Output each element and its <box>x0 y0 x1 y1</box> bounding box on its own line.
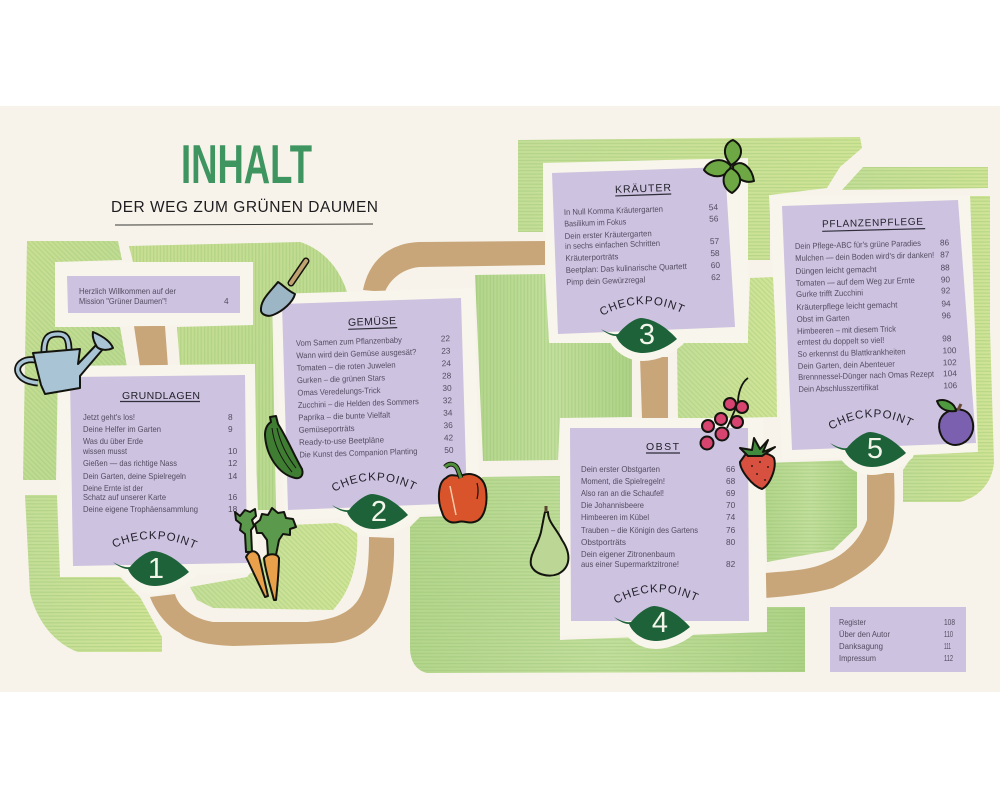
entries: Pflanzenpflege: Dein Abschlusszertifikat <box>798 382 879 394</box>
entries: Gemüse: Tomaten – die roten Juwelen <box>297 360 396 373</box>
panel: Kräuter <box>552 168 735 353</box>
checkpoint 2 leaf <box>332 494 408 529</box>
panel: Gemüse <box>282 298 466 529</box>
entries: Gemüse: 30 <box>442 383 452 393</box>
entries: Gemüse: Gurken – die grünen Stars <box>297 372 385 385</box>
icon: zucchini <box>265 416 303 478</box>
entries: Kräuter: 62 <box>711 272 721 282</box>
entries: Kräuter: 57 <box>710 236 720 246</box>
entries: Grundlagen: 18 <box>228 504 238 514</box>
garden fields <box>23 137 994 673</box>
entries: Kräuter: Dein erster Kräutergarten <box>565 228 652 241</box>
icon: bell pepper <box>439 464 486 523</box>
entries: Grundlagen: 9 <box>228 424 233 434</box>
field: top left <box>23 241 127 480</box>
entries: Obst <box>581 464 736 569</box>
entries: Grundlagen <box>82 412 238 514</box>
entries: Kräuter: Basilikum im Fokus <box>564 216 626 228</box>
entries: Gemüse: Omas Veredelungs-Trick <box>297 385 381 398</box>
icon: basil <box>704 140 754 193</box>
paper background <box>0 106 1000 692</box>
entries: Grundlagen: 10 <box>228 446 238 456</box>
heading: Obst: OBST <box>646 441 680 453</box>
entries: Grundlagen: wissen musst <box>82 446 128 456</box>
entries: Gemüse: Vom Samen zum Pflanzenbaby <box>296 335 403 348</box>
entries: appendix: 111 <box>944 641 951 651</box>
field: lower left <box>25 495 162 652</box>
icon: pear <box>531 506 568 576</box>
entries: Obst: 66 <box>726 464 736 474</box>
panel: Grundlagen <box>70 375 247 586</box>
path: start to Grundlagen <box>134 326 168 367</box>
entries: appendix: Über den Autor <box>839 629 890 639</box>
entries: Pflanzenpflege: Himbeeren – mit diesem Trick <box>797 324 897 336</box>
entries: Pflanzenpflege: Kräuterpflege leicht gemacht <box>796 300 898 312</box>
checkpoint 2 label: CHECKPOINT <box>332 472 418 490</box>
icon: trowel <box>261 261 306 316</box>
entries: Grundlagen: Dein Garten, deine Spielregeln <box>83 471 186 481</box>
checkpoint 5 label: CHECKPOINT <box>829 409 914 428</box>
entries: Gemüse: 34 <box>443 408 453 418</box>
entries: Obst: Trauben – die Königin des Gartens <box>581 525 698 535</box>
entries: appendix: 110 <box>944 629 953 639</box>
icon: carrots <box>235 508 296 600</box>
panel: welcome <box>67 276 240 313</box>
checkpoint 5 leaf <box>830 432 906 467</box>
title: INHALT <box>181 133 312 195</box>
entries: Obst: 70 <box>726 500 736 510</box>
icon: watering can <box>18 332 113 394</box>
field: right strip <box>903 196 994 502</box>
welcome entry: Herzlich Willkommen auf der <box>79 286 176 296</box>
path: checkpoint 3 to Obst <box>640 357 668 418</box>
entries: Pflanzenpflege: 98 <box>942 333 952 343</box>
entries: Pflanzenpflege: 92 <box>941 285 951 295</box>
entries: Kräuter: 54 <box>709 202 719 212</box>
entries: Obst: Dein erster Obstgarten <box>581 464 660 474</box>
entries: Obst: Moment, die Spielregeln! <box>581 476 665 486</box>
entries: Obst: Die Johannisbeere <box>581 500 644 510</box>
entries: appendix: 108 <box>944 617 955 627</box>
entries: Pflanzenpflege: Brennnessel-Dünger nach Omas Rezept <box>798 369 935 382</box>
icon: plum <box>937 400 973 445</box>
entries: Grundlagen: 16 <box>228 492 238 502</box>
entries: Obst: Himbeeren im Kübel <box>581 512 649 522</box>
entries: Pflanzenpflege: 104 <box>943 368 957 378</box>
entries: Gemüse: 28 <box>442 370 452 381</box>
field: top herbs <box>518 137 862 260</box>
panel: appendix <box>830 607 966 672</box>
entries: Pflanzenpflege: 87 <box>940 249 950 259</box>
checkpoint 3 leaf: 3 <box>639 319 655 351</box>
entries: Kräuter: In Null Komma Kräutergarten <box>564 204 663 217</box>
entries: Grundlagen: 8 <box>228 412 233 422</box>
entries: Gemüse: Ready-to-use Beetpläne <box>299 434 384 447</box>
heading: Gemüse: GEMÜSE <box>348 315 396 329</box>
entries: Gemüse: 50 <box>444 445 454 455</box>
entries: Obst: aus einer Supermarktzitrone! <box>581 559 679 569</box>
entries: Pflanzenpflege: 88 <box>940 262 950 272</box>
field: top right <box>842 167 988 190</box>
entries: Pflanzenpflege: 86 <box>940 237 950 247</box>
entries: appendix <box>839 617 955 663</box>
entries: Kräuter: Beetplan: Das kulinarische Quartett <box>566 261 688 275</box>
field: bottom centre <box>190 523 357 610</box>
heading: Pflanzenpflege: PFLANZENPFLEGE <box>822 217 923 230</box>
entries: Obst: 80 <box>726 537 736 547</box>
entries: appendix: 112 <box>944 653 953 663</box>
entries: Obst: 82 <box>726 559 736 569</box>
entries: Obst: 69 <box>726 488 736 498</box>
entries: Kräuter: Kräuterporträts <box>565 251 619 263</box>
field: centre upper <box>475 274 632 461</box>
entries: appendix: Impressum <box>839 653 876 663</box>
entries: appendix: Register <box>839 617 866 627</box>
subtitle: DER WEG ZUM GRÜNEN DAUMEN <box>111 198 378 216</box>
entries: Pflanzenpflege: Dein Pflege-ABC für's grüne Paradies <box>795 238 921 251</box>
panel: Obst <box>570 428 749 641</box>
entries: Grundlagen: Jetzt geht's los! <box>83 412 135 422</box>
checkpoint 3 label: CHECKPOINT <box>600 296 686 314</box>
entries: Pflanzenpflege: 96 <box>942 310 951 320</box>
card surrounds <box>55 158 978 641</box>
entries: Kräuter: 60 <box>711 260 721 270</box>
entries: Gemüse: 24 <box>441 358 451 368</box>
entries: Pflanzenpflege: Düngen leicht gemacht <box>795 264 877 276</box>
entries: Pflanzenpflege: Tomaten — auf dem Weg zur Ernte <box>796 275 915 288</box>
entries: Gemüse: Paprika – die bunte Vielfalt <box>298 409 391 422</box>
entries: Pflanzenpflege: Dein Garten, dein Abenteuer <box>798 359 895 371</box>
entries: Obst: 74 <box>726 512 736 522</box>
entries: Gemüse: Die Kunst des Companion Planting <box>299 446 418 460</box>
welcome entry <box>79 286 229 306</box>
entries: Gemüse <box>296 333 454 460</box>
entries: Gemüse: Wann wird dein Gemüse ausgesät? <box>296 347 417 360</box>
entries: Grundlagen: 14 <box>228 471 238 481</box>
icon: currants <box>700 378 748 450</box>
entries: Obst: Dein eigener Zitronenbaum <box>581 549 675 559</box>
field: top centre <box>129 242 347 510</box>
checkpoint 2 leaf: 2 <box>371 496 387 528</box>
entries: Grundlagen: Deine Ernte ist der <box>83 483 143 493</box>
entries: Pflanzenpflege: erntest du doppelt so viel! <box>797 335 884 347</box>
entries: Pflanzenpflege: 102 <box>943 357 957 367</box>
welcome entry: 4 <box>224 296 229 306</box>
entries: Pflanzenpflege: 100 <box>942 345 957 355</box>
entries: Kräuter: Pimp dein Gewürzregal <box>566 274 645 287</box>
icon: strawberry <box>740 438 775 489</box>
checkpoint 4 leaf <box>614 606 690 641</box>
path: checkpoint 1 to Gemüse <box>150 537 394 646</box>
entries: Gemüse: 32 <box>443 395 453 405</box>
entries: Pflanzenpflege: 90 <box>941 274 951 284</box>
entries: Obst: Obstporträts <box>581 537 626 547</box>
checkpoint 1 leaf: 1 <box>148 553 164 585</box>
entries: Gemüse: 42 <box>444 432 454 443</box>
heading: Kräuter: KRÄUTER <box>615 182 672 196</box>
entries: Pflanzenpflege: 106 <box>943 380 958 390</box>
path: checkpoint 5 to end <box>765 473 895 598</box>
checkpoint 1 label: CHECKPOINT <box>112 531 198 548</box>
field: lower right <box>765 460 857 562</box>
garden paths <box>134 241 895 646</box>
welcome entry: Mission "Grüner Daumen"! <box>79 296 167 306</box>
entries: Grundlagen: Gießen — das richtige Nass <box>83 458 177 468</box>
checkpoint 5 leaf: 5 <box>867 433 883 465</box>
entries: Pflanzenpflege: Obst im Garten <box>797 313 850 324</box>
panel: Pflanzenpflege <box>782 200 976 467</box>
entries: Pflanzenpflege <box>795 237 958 394</box>
entries: Obst: 76 <box>726 525 736 535</box>
entries: Grundlagen: 12 <box>228 458 238 468</box>
entries: Kräuter: in sechs einfachen Schritten <box>565 238 660 251</box>
checkpoint 4 leaf: 4 <box>652 607 668 639</box>
entries: Grundlagen: Was du über Erde <box>83 436 143 446</box>
entries: Gemüse: 36 <box>443 420 453 430</box>
entries: Gemüse: Gemüseporträts <box>298 423 355 435</box>
entries: Grundlagen: Deine Helfer im Garten <box>83 424 161 434</box>
entries: Grundlagen: Schatz auf unserer Karte <box>83 492 166 502</box>
field: right of centre <box>677 277 777 419</box>
entries: Pflanzenpflege: Gurke trifft Zucchini <box>796 287 863 299</box>
entries: Gemüse: Zucchini – die Helden des Sommers <box>298 396 419 410</box>
checkpoint 4 label: CHECKPOINT <box>614 584 699 602</box>
path: checkpoint 2 to Kräuter <box>363 241 545 292</box>
checkpoint 1 leaf <box>113 551 189 586</box>
entries: Pflanzenpflege: Mulchen — dein Boden wird's dir danken! <box>795 250 934 263</box>
entries: Obst: 68 <box>726 476 736 486</box>
field: centre lower <box>410 476 805 673</box>
entries: Gemüse: 23 <box>441 346 451 356</box>
entries: Kräuter: 56 <box>709 213 719 224</box>
entries: Grundlagen: Deine eigene Trophäensammlung <box>83 504 198 514</box>
entries: Kräuter: 58 <box>710 248 720 258</box>
entries: appendix: Danksagung <box>839 641 883 651</box>
checkpoint 3 leaf <box>601 318 677 353</box>
entries: Pflanzenpflege: So erkennst du Blattkrankheiten <box>797 346 906 359</box>
heading: Grundlagen: GRUNDLAGEN <box>122 390 200 402</box>
entries: Pflanzenpflege: 94 <box>941 298 951 308</box>
entries: Kräuter <box>564 202 721 287</box>
entries: Obst: Also ran an die Schaufel! <box>581 488 664 498</box>
entries: Gemüse: 22 <box>441 333 451 343</box>
